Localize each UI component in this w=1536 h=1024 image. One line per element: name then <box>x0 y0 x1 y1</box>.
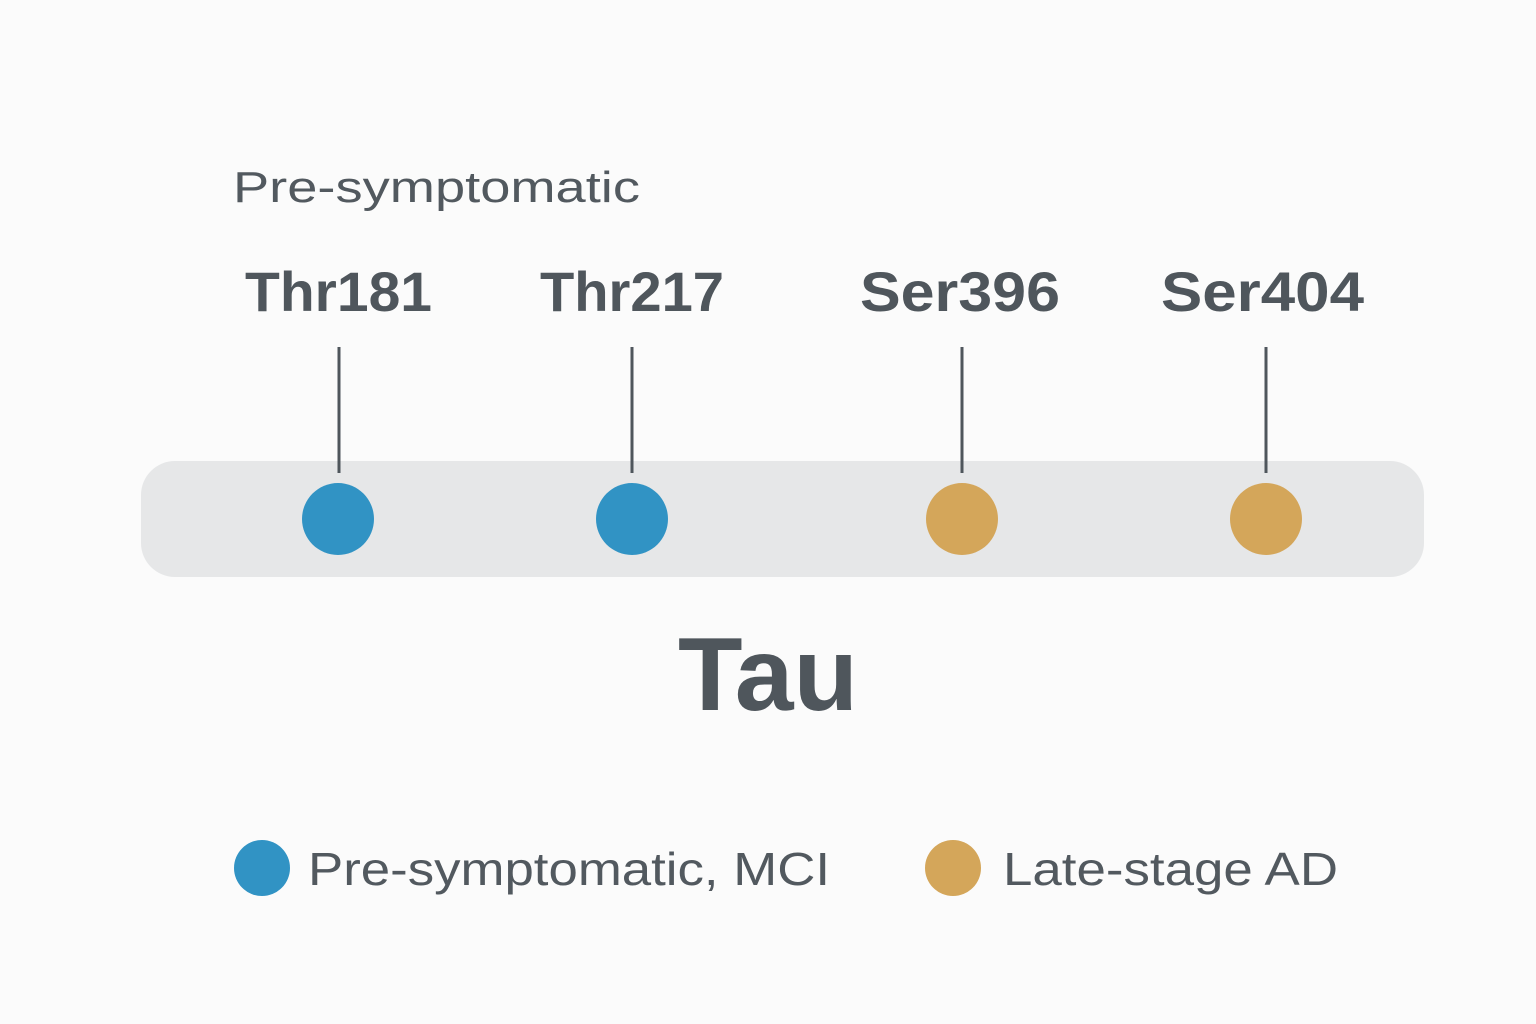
tau protein bar <box>141 461 1424 577</box>
heading: pre-symptomatic: Pre-symptomatic <box>233 163 640 212</box>
legend <box>234 840 1338 896</box>
connector lines <box>339 347 1266 473</box>
legend: Late-stage AD <box>1003 843 1338 895</box>
title: Tau: Tau <box>678 617 858 733</box>
site labels: Ser396 <box>860 260 1060 323</box>
site labels: Ser404 <box>1161 260 1364 323</box>
site labels: Thr217 <box>540 260 724 323</box>
phosphorylation site markers <box>302 483 1302 555</box>
site labels: Thr181 <box>245 260 432 323</box>
legend: Pre-symptomatic, MCI <box>308 843 830 895</box>
site labels <box>245 260 1364 323</box>
